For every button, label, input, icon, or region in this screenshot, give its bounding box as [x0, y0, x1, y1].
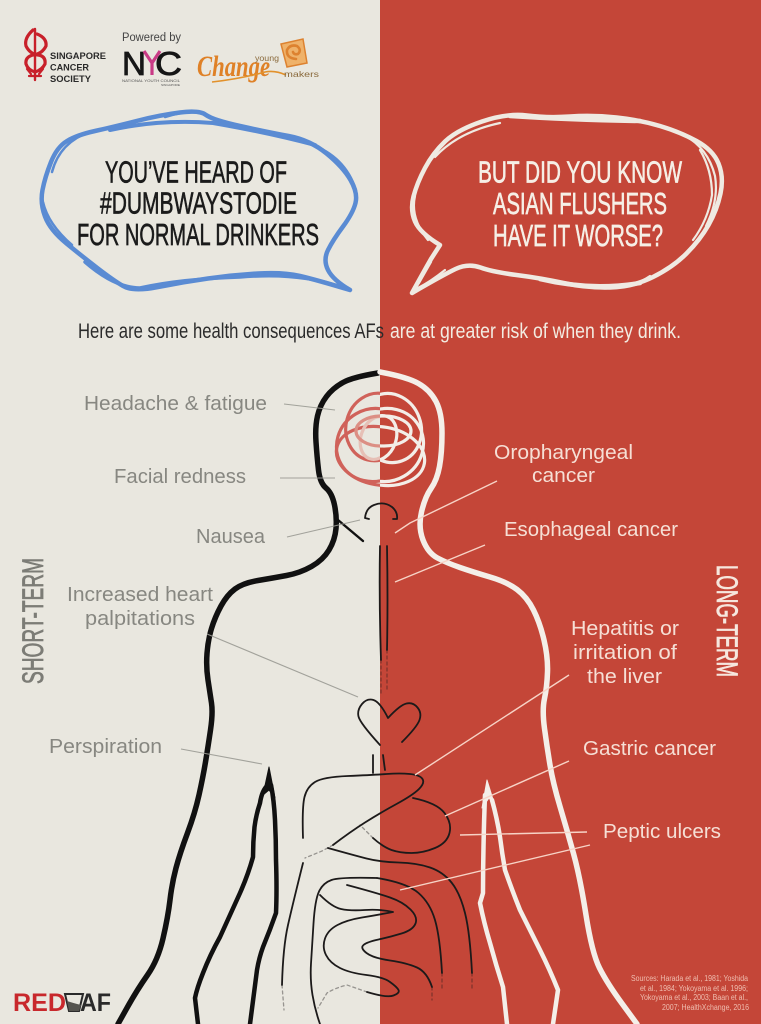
body outline: right white	[380, 372, 637, 1024]
labels: long-term effects: irritation of	[573, 642, 677, 664]
logo: RED AF: AF	[80, 989, 111, 1017]
stomach	[373, 798, 450, 853]
labels: short-term effects	[49, 393, 267, 758]
logo: Young ChangeMakers	[197, 39, 319, 83]
labels: long-term effects	[494, 442, 721, 843]
bubble text: FOR NORMAL DRINKERS	[77, 217, 319, 252]
bubble text	[478, 154, 682, 253]
intro sentence: Here are some health consequences AFs	[78, 320, 384, 343]
bubble text: ASIAN FLUSHERS	[493, 186, 667, 221]
faded gut trails	[282, 825, 472, 1010]
labels: short-term effects: Nausea	[196, 526, 266, 548]
bubble text	[77, 154, 319, 252]
labels: short-term effects: Increased heart	[67, 584, 213, 606]
side heading: short-term: SHORT-TERM	[17, 558, 50, 684]
scribble right half	[380, 392, 426, 488]
throat and oesophagus	[365, 503, 397, 695]
logo: Powered by NYC: N	[122, 45, 146, 82]
labels: long-term effects: Oropharyngeal	[494, 442, 633, 464]
labels: long-term effects: the liver	[587, 666, 662, 688]
sources: et al., 1984; Yokoyama et al. 1996;	[640, 984, 748, 993]
sources	[631, 974, 749, 1012]
bubble text: #DUMBWAYSTODIE	[100, 186, 297, 220]
logo: Singapore Cancer Society: SOCIETY	[50, 74, 91, 84]
labels: long-term effects: Peptic ulcers	[603, 821, 721, 843]
logo: Young ChangeMakers: young	[255, 54, 279, 63]
upper intestine	[328, 848, 472, 973]
logo: RED AF: RED	[13, 989, 66, 1017]
bubble outline cream	[412, 115, 722, 293]
intro sentence	[78, 320, 681, 343]
large intestine	[311, 878, 377, 1024]
labels: long-term effects: Esophageal cancer	[504, 519, 678, 541]
bubble text: YOU’VE HEARD OF	[105, 154, 287, 190]
outer torso	[282, 863, 303, 985]
panel: left cream background	[0, 0, 380, 1024]
leader lines: long-term	[395, 481, 590, 890]
digestive organs	[282, 774, 472, 1024]
side heading: long-term: LONG-TERM	[710, 565, 743, 677]
logo: Powered by NYC: Powered by	[122, 32, 181, 44]
logo: Singapore Cancer Society: CANCER	[50, 62, 89, 72]
logo: Powered by NYC: C	[155, 45, 182, 82]
heart	[358, 700, 420, 773]
logo: Young ChangeMakers: Change	[197, 50, 270, 83]
labels: short-term effects: Facial redness	[114, 466, 246, 488]
logo: Powered by NYC	[122, 32, 182, 87]
logo: Powered by NYC: NATIONAL YOUTH COUNCIL	[122, 79, 180, 83]
logo: Singapore Cancer Society: SINGAPORE	[50, 51, 106, 61]
labels: short-term effects: Perspiration	[49, 736, 162, 758]
left arm inner gap	[195, 785, 268, 1024]
scribble in head: headache	[334, 392, 426, 488]
bubble outline blue	[42, 112, 356, 290]
logo: Singapore Cancer Society	[26, 29, 106, 84]
speech bubble: left	[42, 112, 356, 290]
logo: Young ChangeMakers: makers	[284, 69, 319, 79]
small intestine	[347, 885, 432, 987]
scribble left half	[334, 392, 380, 487]
speech bubble: right	[412, 115, 722, 293]
leader lines: short-term	[181, 404, 360, 764]
icon: orange swirl	[281, 39, 307, 67]
panel: right red background	[380, 0, 761, 1024]
liver	[303, 774, 423, 845]
body outline: left black	[118, 373, 378, 1024]
labels: long-term effects: Hepatitis or	[571, 618, 679, 640]
icon: glass	[65, 994, 83, 1011]
intro sentence: are at greater risk of when they drink.	[390, 320, 681, 343]
sources: Yokoyama et al., 2003; Baan et al.,	[640, 993, 748, 1002]
labels: short-term effects: palpitations	[85, 608, 195, 630]
sources: 2007; HealthXchange, 2016	[662, 1003, 749, 1012]
labels: long-term effects: cancer	[532, 465, 595, 487]
bubble text: HAVE IT WORSE?	[493, 218, 663, 253]
icon: caduceus	[26, 29, 46, 80]
logo: RED AF	[13, 989, 111, 1017]
labels: long-term effects: Gastric cancer	[583, 738, 716, 760]
logo: Powered by NYC: SINGAPORE	[161, 83, 180, 87]
labels: short-term effects: Headache & fatigue	[84, 393, 267, 415]
right arm inner gap	[480, 795, 507, 1024]
icon: NYC coloured Y	[144, 51, 160, 75]
neck branch	[338, 520, 363, 541]
